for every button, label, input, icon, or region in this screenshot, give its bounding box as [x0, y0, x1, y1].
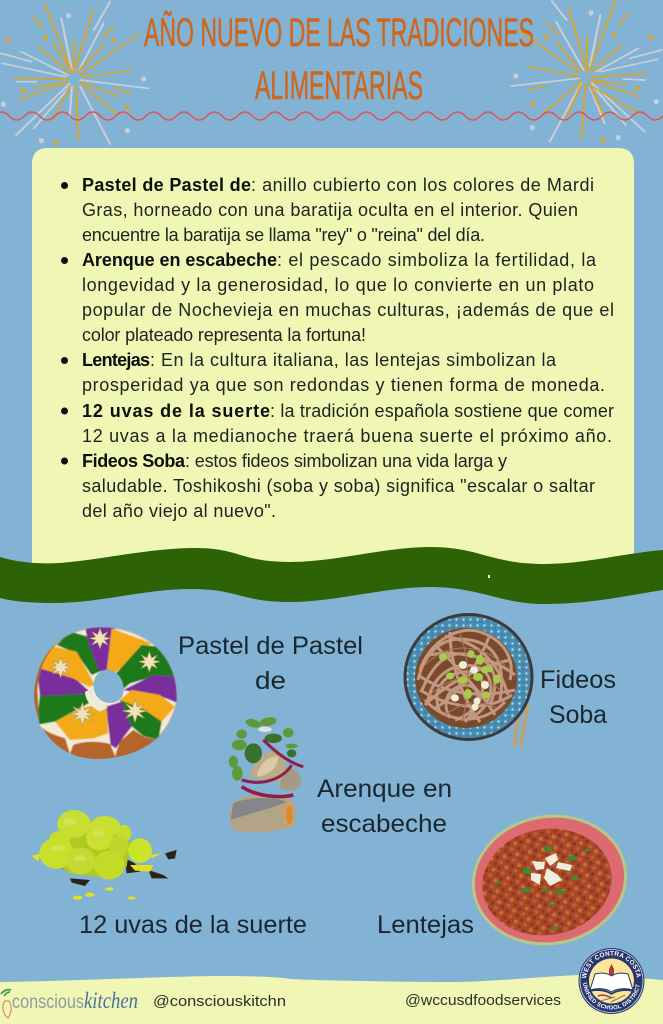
- label: grapes: 12 uvas de la suerte: [79, 911, 307, 939]
- bulleted list of traditions: : En la cultura italiana, las lentejas simbolizan la: [150, 350, 557, 370]
- logo: conscious kitchen: conscious: [12, 992, 84, 1013]
- icon: green grapes: [32, 810, 177, 900]
- bulleted list of traditions: 12 uvas a la medianoche traerá buena suerte el próximo año.: [82, 426, 612, 446]
- bulleted list of traditions: del año viejo al nuevo".: [82, 501, 276, 521]
- bulleted list of traditions: : estos fideos simbolizan una vida larga y: [185, 451, 507, 471]
- logo: school district seal: [578, 948, 644, 1014]
- bulleted list of traditions: [61, 175, 614, 521]
- bulleted list of traditions: Arenque en escabeche: [82, 250, 277, 270]
- icon: pickled herring: [229, 716, 303, 832]
- label: soba: Fideos: [540, 666, 616, 694]
- label: herring: escabeche: [321, 810, 447, 838]
- icon: king cake: [34, 627, 178, 759]
- label: herring: Arenque en: [317, 775, 452, 803]
- label: king cake: Pastel de Pastel: [178, 632, 363, 660]
- decorative red squiggle divider: [0, 112, 663, 120]
- bulleted list of traditions: prosperidad ya que son redondas y tienen forma de moneda.: [82, 375, 605, 395]
- label: herring: [317, 775, 452, 838]
- label: soba: [540, 666, 616, 729]
- bulleted list of traditions: 12 uvas de la suerte: [82, 401, 270, 421]
- bulleted list of traditions: : anillo cubierto con los colores de Mardi: [251, 175, 594, 195]
- label: king cake: [178, 632, 363, 695]
- logo: conscious kitchen: kitchen: [84, 988, 138, 1013]
- title: ALIMENTARIAS: [255, 64, 423, 108]
- footer band: [0, 975, 663, 1024]
- bulleted list of traditions: popular de Nochevieja en muchas culturas, ¡además de que el: [82, 300, 614, 320]
- logo: conscious kitchen: [1, 988, 138, 1018]
- label: lentils: Lentejas: [377, 911, 474, 939]
- bulleted list of traditions: Fideos Soba: [82, 451, 186, 471]
- title: [144, 10, 534, 108]
- icon: right firework: [512, 1, 662, 143]
- bulleted list of traditions: Gras, horneado con una baratija oculta en el interior. Quien: [82, 200, 578, 220]
- label: king cake: de: [255, 667, 286, 695]
- icon: soba bowl: [404, 613, 534, 747]
- icon: lentil plate: [461, 802, 638, 958]
- bulleted list of traditions: Lentejas: [82, 350, 150, 370]
- logo: school district seal: WEST CONTRA COSTA: [582, 951, 641, 978]
- green wave band: [0, 547, 663, 604]
- icon: left firework: [1, 2, 148, 146]
- social handle: wccusd food services: @wccusdfoodservices: [405, 992, 561, 1009]
- panel: traditions text card: [32, 148, 634, 575]
- logo: school district seal: UNIFIED SCHOOL DISTRICT: [583, 982, 640, 1010]
- bulleted list of traditions: encuentre la baratija se llama "rey" o "reina" del día.: [82, 225, 485, 245]
- social handle: conscious kitchen: @consciouskitchn: [153, 993, 286, 1010]
- bulleted list of traditions: Pastel de Pastel de: [82, 175, 251, 195]
- label: soba: Soba: [549, 701, 607, 729]
- bulleted list of traditions: longevidad y la generosidad, lo que lo convierte en un plato: [82, 275, 594, 295]
- bulleted list of traditions: : la tradición española sostiene que comer: [270, 401, 614, 421]
- bulleted list of traditions: color plateado representa la fortuna!: [82, 325, 366, 345]
- bulleted list of traditions: : el pescado simboliza la fertilidad, la: [277, 250, 597, 270]
- bulleted list of traditions: saludable. Toshikoshi (soba y soba) significa "escalar o saltar: [82, 476, 595, 496]
